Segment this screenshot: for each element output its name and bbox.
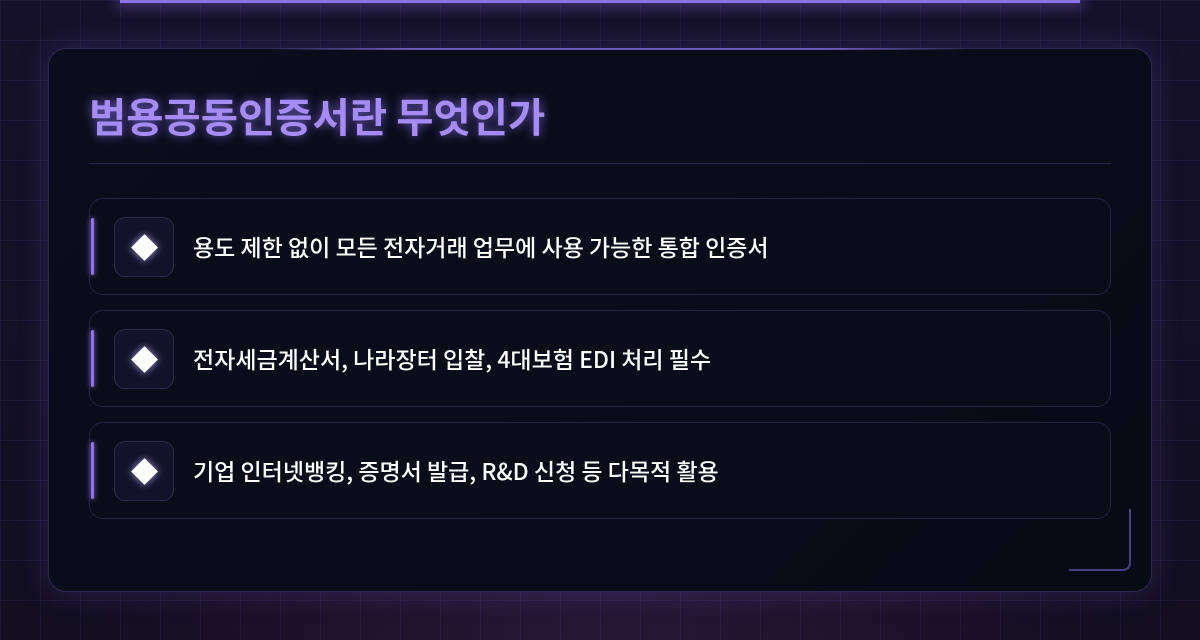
text 1: 용도 제한 없이 모든 전자거래 업무에 사용 가능한 통합 인증서: [193, 229, 769, 263]
title: 범용공동인증서란 무엇인가: [89, 85, 545, 144]
icon: diamond: [114, 441, 174, 501]
item 3: [89, 422, 1111, 519]
text 2: 전자세금계산서, 나라장터 입찰, 4대보험 EDI 처리 필수: [193, 341, 711, 375]
panel: main card: [48, 48, 1152, 592]
icon: diamond: [114, 217, 174, 277]
item 1: [89, 198, 1111, 295]
text 3: 기업 인터넷뱅킹, 증명서 발급, R&D 신청 등 다목적 활용: [193, 453, 719, 487]
icon: diamond: [114, 329, 174, 389]
item 2: [89, 310, 1111, 407]
top glow bar: [120, 0, 1080, 3]
corner decoration: [1069, 509, 1131, 571]
